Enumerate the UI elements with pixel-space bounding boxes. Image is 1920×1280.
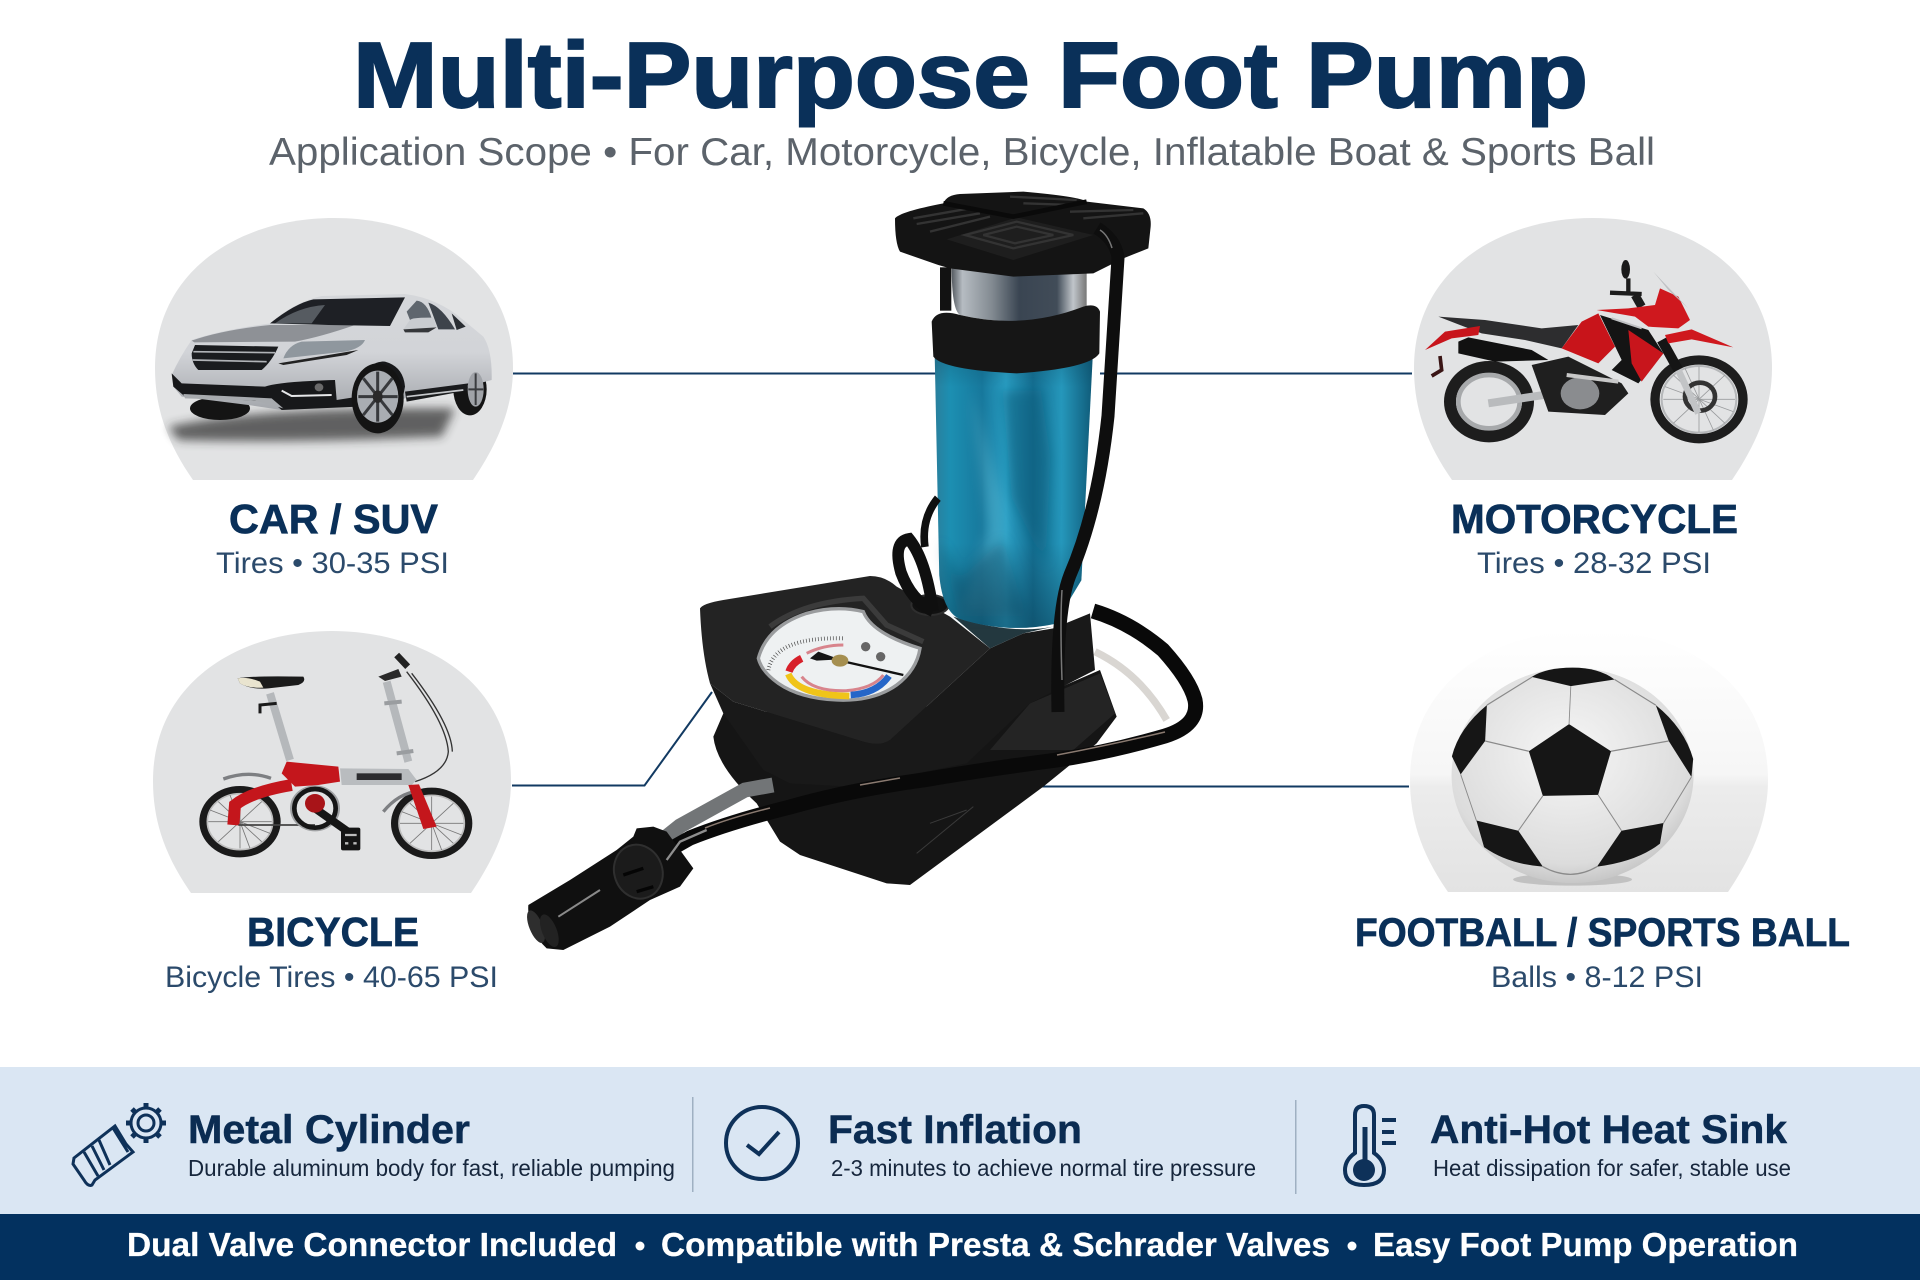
text: banner item 3: Easy Foot Pump Operation	[1373, 1226, 1798, 1263]
feature: anti-hot heat sink	[1345, 1106, 1791, 1185]
icon: football	[1452, 668, 1694, 886]
footer banner	[0, 1214, 1920, 1280]
text: bicycle psi: Bicycle Tires • 40-65 PSI	[165, 961, 498, 994]
pump: top pedal	[895, 192, 1151, 277]
feature: fast inflation	[726, 1107, 1256, 1181]
text: anti-hot heading: Anti-Hot Heat Sink	[1430, 1108, 1788, 1152]
icon: car	[168, 294, 492, 441]
text: motorcycle psi: Tires • 28-32 PSI	[1477, 547, 1711, 580]
icon: thermometer	[1345, 1106, 1396, 1185]
divider	[1295, 1100, 1296, 1194]
pump: blue cylinder and pedal	[898, 344, 1093, 628]
text: anti-hot description: Heat dissipation for safer, stable use	[1433, 1155, 1791, 1181]
icon: motorcycle	[1425, 260, 1743, 439]
panel: bicycle	[153, 631, 511, 994]
heading: bicycle: BICYCLE	[247, 909, 419, 955]
heading: motorcycle: MOTORCYCLE	[1451, 496, 1738, 542]
text: banner item 2: Compatible with Presta & Schrader Valves	[661, 1226, 1330, 1263]
heading: car / suv: CAR / SUV	[229, 496, 439, 542]
subtitle: Application Scope • For Car, Motorcycle, Bicycle, Inflatable Boat & Sports Ball	[269, 131, 1655, 174]
football image backdrop	[1410, 630, 1768, 892]
icon: cylinder and gear	[73, 1103, 166, 1185]
motorcycle image backdrop	[1414, 218, 1772, 480]
bullet	[636, 1242, 644, 1250]
pump: lower foot plate	[713, 652, 1167, 885]
pump: grey hose	[650, 785, 773, 850]
feature: metal cylinder	[73, 1103, 675, 1185]
text: metal cylinder heading: Metal Cylinder	[188, 1108, 470, 1152]
pump: side strap	[1058, 228, 1118, 712]
panel: motorcycle	[1414, 218, 1772, 580]
pump: collar	[932, 305, 1100, 373]
bicycle image backdrop	[153, 631, 511, 893]
panel: car / suv	[155, 218, 513, 580]
bullet	[1348, 1242, 1356, 1250]
text: banner item 1: Dual Valve Connector Included	[127, 1226, 617, 1263]
icon: check circle	[726, 1107, 798, 1179]
title: Multi-Purpose Foot Pump	[353, 23, 1588, 127]
heading: football: FOOTBALL / SPORTS BALL	[1355, 911, 1850, 955]
pump: main hose	[660, 611, 1196, 855]
pump: nozzle	[523, 827, 707, 950]
divider	[692, 1097, 694, 1192]
panel: football	[1355, 630, 1850, 994]
car image backdrop	[155, 218, 513, 480]
text: metal cylinder description: Durable aluminum body for fast, reliable pumping	[188, 1155, 675, 1181]
icon: bicycle	[203, 655, 468, 855]
text: car psi: Tires • 30-35 PSI	[216, 547, 449, 580]
pump: gauge	[758, 609, 920, 700]
foot pump illustration	[523, 192, 1196, 950]
pump: chrome piston	[952, 267, 1087, 321]
text: football psi: Balls • 8-12 PSI	[1491, 961, 1703, 994]
feature band	[0, 1067, 1920, 1214]
text: fast inflation description: 2-3 minutes to achieve normal tire pressure	[831, 1155, 1256, 1181]
text: fast inflation heading: Fast Inflation	[828, 1108, 1082, 1152]
connector lines	[512, 374, 1412, 786]
pump: base housing	[700, 576, 1095, 787]
